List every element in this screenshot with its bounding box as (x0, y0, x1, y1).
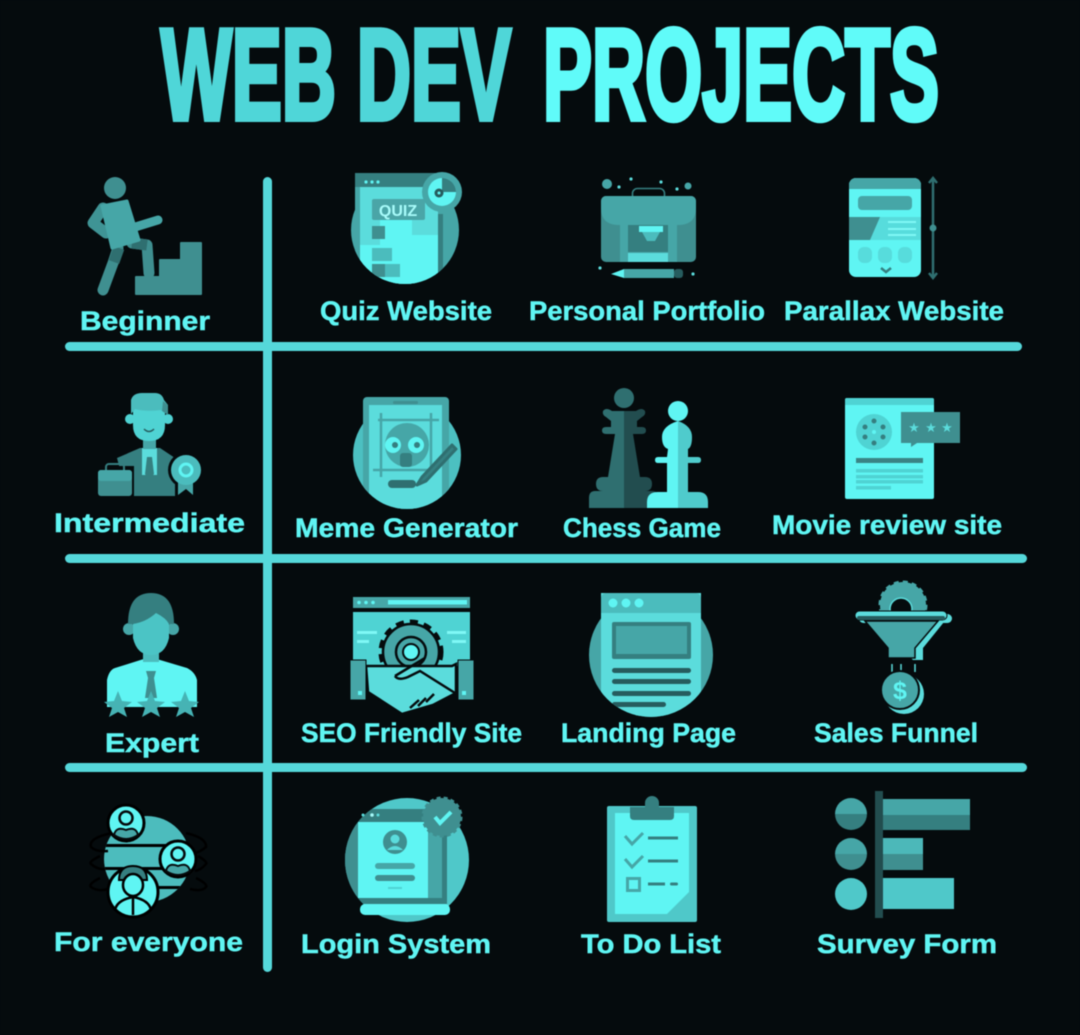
icon: chess game (589, 388, 708, 508)
icon: movie review site: ★ (941, 421, 953, 436)
queen piece (589, 388, 658, 508)
label: For everyone: For everyone (54, 927, 243, 957)
title: WEB DEV (161, 3, 511, 147)
label: Meme Generator: Meme Generator (295, 513, 519, 543)
label: Landing Page: Landing Page (561, 718, 736, 748)
icon: personal portfolio briefcase (598, 177, 696, 278)
label: Sales Funnel: Sales Funnel (814, 718, 978, 748)
icon: survey form bars (835, 791, 970, 918)
label: Movie review site: Movie review site (772, 510, 1002, 540)
icon: login system (340, 798, 469, 922)
label: Beginner: Beginner (80, 306, 211, 336)
icon: parallax website (849, 178, 937, 278)
label: Expert: Expert (105, 728, 199, 758)
label: To Do List: To Do List (581, 929, 721, 959)
icon: to do list clipboard (607, 796, 697, 922)
icon: quiz website: QUIZ (379, 203, 417, 220)
icon: movie review site: ★ (925, 421, 937, 436)
label: Parallax Website: Parallax Website (784, 296, 1004, 326)
label: Personal Portfolio: Personal Portfolio (529, 296, 765, 326)
label: Survey Form: Survey Form (817, 929, 997, 959)
icon: movie review site (845, 398, 960, 499)
icon: beginner climbing stairs (93, 177, 201, 294)
icon: quiz website (351, 172, 462, 292)
label: Intermediate: Intermediate (54, 508, 245, 538)
icon: landing page (589, 593, 713, 723)
icon: movie review site: ★ (908, 421, 920, 436)
label: Login System: Login System (301, 929, 491, 959)
label: SEO Friendly Site: SEO Friendly Site (301, 718, 522, 748)
icon: intermediate businessman (96, 393, 204, 498)
icon: expert with stars (104, 593, 199, 717)
icon: meme generator (353, 397, 461, 512)
icon: sales funnel: $ (893, 677, 907, 705)
pawn piece (647, 401, 708, 508)
icon: sales funnel (845, 582, 955, 714)
icon: SEO handshake and gear (350, 597, 474, 714)
icon: for everyone globe of people (90, 805, 206, 917)
label: Chess Game: Chess Game (563, 513, 721, 543)
label: Quiz Website: Quiz Website (320, 296, 492, 326)
